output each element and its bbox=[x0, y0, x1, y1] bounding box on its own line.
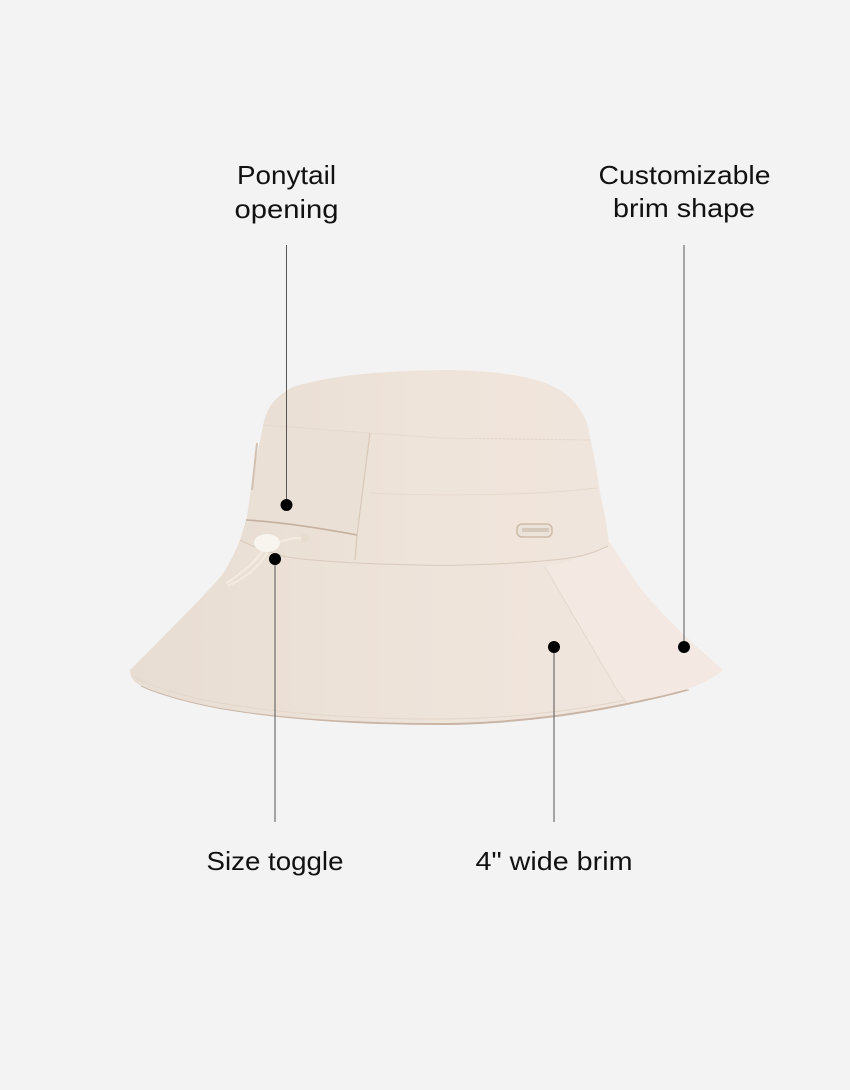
size toggle bead bbox=[254, 534, 280, 552]
callout: brim shape pointer bbox=[678, 245, 690, 653]
label: Size toggle: Size toggle bbox=[206, 846, 344, 876]
callout: wide brim pointer bbox=[548, 641, 560, 822]
callout: size toggle pointer bbox=[269, 553, 281, 822]
ponytail opening slit bbox=[246, 520, 357, 535]
brim binding line bbox=[134, 677, 625, 719]
label: Customizable brim shape: brim shape bbox=[613, 193, 755, 223]
hat crown bbox=[240, 370, 609, 565]
ponytail panel bbox=[247, 427, 370, 535]
brim seam bbox=[545, 567, 627, 703]
panel top stitching bbox=[263, 425, 590, 440]
right brim panel bbox=[545, 543, 723, 703]
label: Ponytail opening: Ponytail bbox=[237, 160, 336, 190]
label: Ponytail opening bbox=[234, 160, 338, 224]
side shadow bbox=[252, 443, 257, 490]
drawstring cord bbox=[227, 538, 305, 585]
crown base seam bbox=[240, 540, 608, 565]
metal logo badge bbox=[517, 524, 552, 537]
hat brim bbox=[130, 520, 723, 723]
callout: ponytail opening pointer bbox=[280, 245, 292, 511]
hat brim underside edge bbox=[140, 680, 690, 725]
panel right edge bbox=[355, 433, 370, 560]
illustration: bucket hat bbox=[130, 370, 723, 725]
label: Customizable brim shape: Customizable bbox=[598, 160, 770, 190]
label: 4" wide brim: 4" wide brim bbox=[476, 846, 632, 876]
label: Ponytail opening: opening bbox=[234, 194, 338, 224]
crown stitching bbox=[370, 488, 597, 495]
cord knot bbox=[301, 534, 309, 542]
label: Customizable brim shape bbox=[598, 160, 770, 223]
